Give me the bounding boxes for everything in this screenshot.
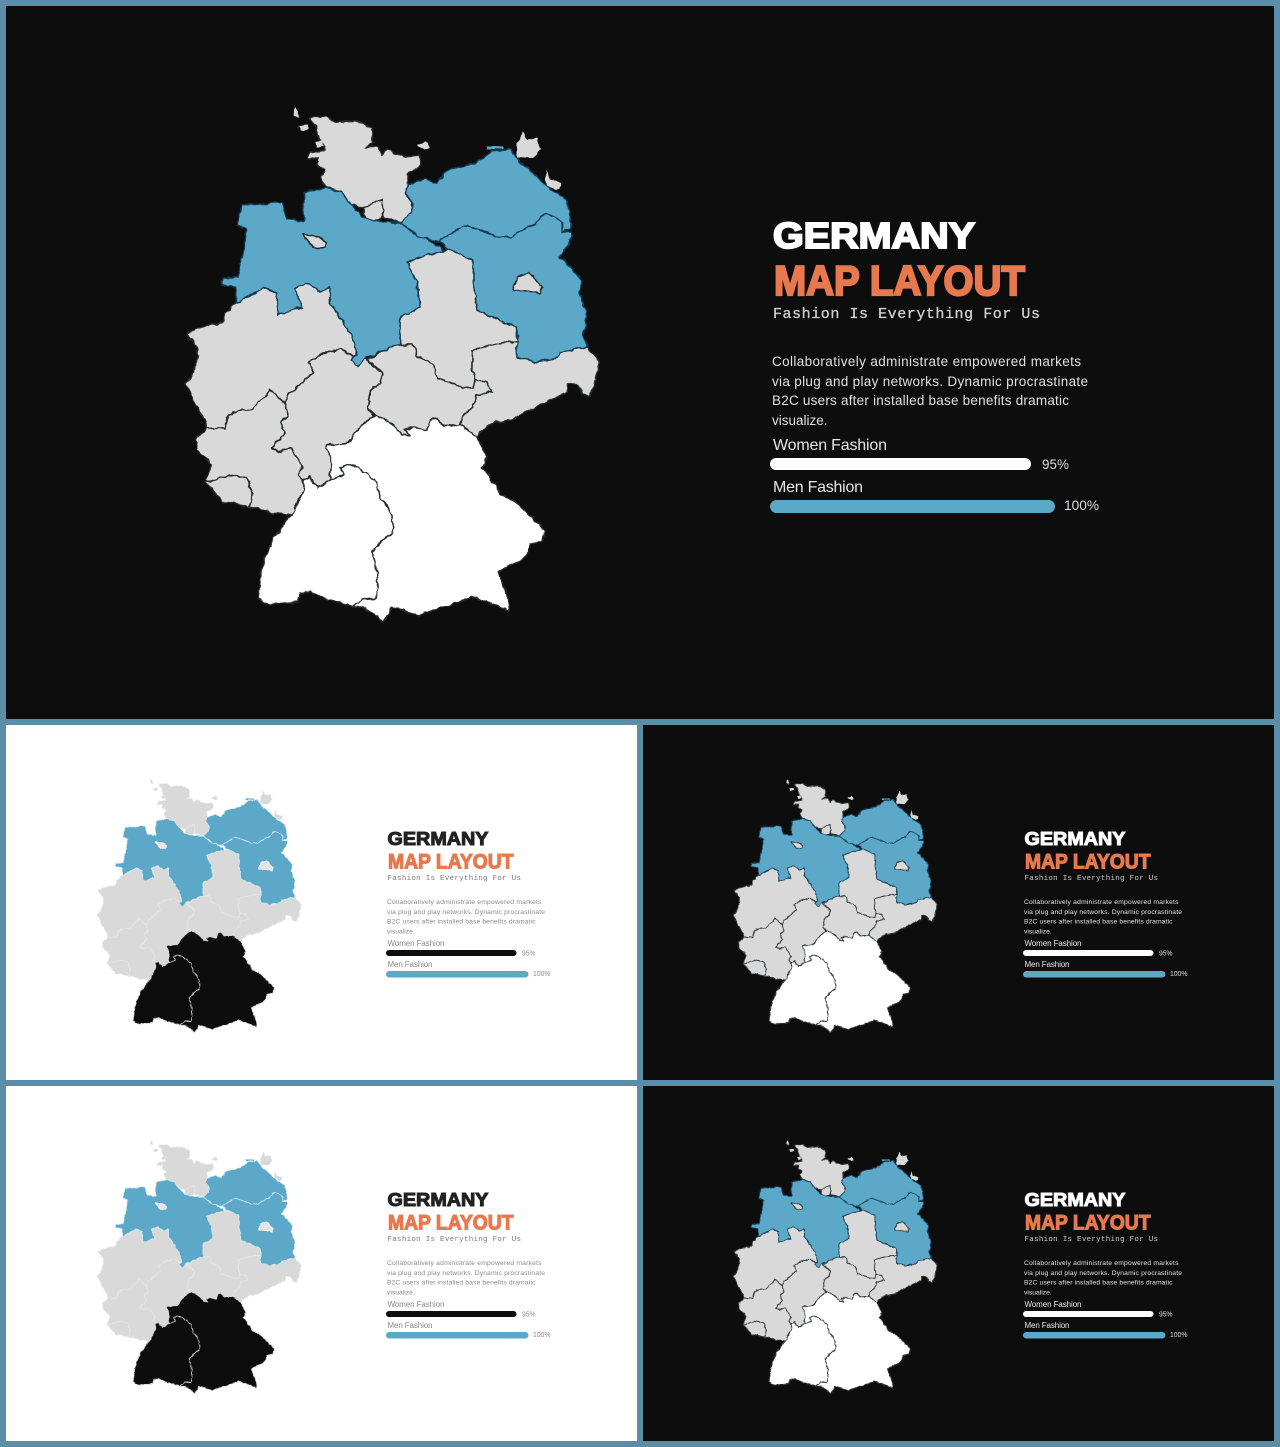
map: Germany dark variant bbox=[733, 1140, 938, 1394]
body text: visualize. bbox=[1024, 928, 1052, 936]
progress: Men Fashion bbox=[1023, 1321, 1188, 1339]
body text bbox=[387, 899, 545, 936]
progress: Men Fashion bbox=[770, 479, 1099, 513]
panel: white slide top left bbox=[6, 725, 637, 1080]
body text bbox=[387, 1260, 545, 1296]
region: Bremen bbox=[303, 234, 327, 249]
map: Germany main bbox=[185, 107, 600, 622]
panel: main dark slide bbox=[6, 6, 1274, 719]
progress: Women Fashion: Women Fashion bbox=[1024, 939, 1082, 948]
progress: Women Fashion bbox=[770, 437, 1069, 472]
text block bbox=[1023, 829, 1188, 978]
heading: Germany: GERMANY bbox=[388, 829, 488, 849]
region: Hesse bbox=[272, 350, 382, 488]
progress: Women Fashion: 95% bbox=[1159, 950, 1172, 958]
heading: Map Layout: MAP LAYOUT bbox=[1025, 1212, 1151, 1234]
region: Brandenburg bbox=[440, 213, 587, 362]
body text: via plug and play networks. Dynamic procrastinate bbox=[772, 374, 1088, 389]
heading: Map Layout: MAP LAYOUT bbox=[388, 1212, 514, 1234]
heading: Map Layout: MAP LAYOUT bbox=[774, 257, 1025, 304]
progress: Women Fashion: 95% bbox=[1042, 456, 1069, 472]
progress: Men Fashion: Men Fashion bbox=[1024, 960, 1070, 969]
blue states bbox=[222, 146, 587, 366]
panel: white slide bottom left bbox=[6, 1086, 637, 1441]
progress: Women Fashion bbox=[386, 939, 536, 958]
progress: Women Fashion bbox=[386, 1300, 536, 1318]
progress: Men Fashion: Men Fashion bbox=[388, 1321, 432, 1330]
progress: Women Fashion: 95% bbox=[522, 950, 536, 958]
gray states bbox=[185, 107, 600, 515]
region: Saarland bbox=[205, 475, 252, 507]
region: Rhineland-Palatinate bbox=[195, 390, 303, 515]
region: Bavaria bbox=[327, 415, 545, 622]
text block: main bbox=[770, 215, 1099, 513]
heading: Germany: GERMANY bbox=[773, 215, 975, 256]
region: Saxony bbox=[460, 342, 600, 437]
progress: Women Fashion: 95% bbox=[1159, 1312, 1172, 1318]
region: Lower Saxony bbox=[222, 188, 445, 366]
progress: Men Fashion: 100% bbox=[533, 971, 550, 978]
progress: Women Fashion: Women Fashion bbox=[388, 939, 444, 948]
progress: Men Fashion: Men Fashion bbox=[773, 479, 863, 496]
body text: via plug and play networks. Dynamic procrastinate bbox=[387, 909, 545, 916]
progress: Men Fashion: Men Fashion bbox=[1024, 1321, 1070, 1330]
region: North Rhine-Westphalia bbox=[185, 283, 357, 428]
body text bbox=[772, 354, 1088, 428]
subtitle: Fashion Is Everything For Us bbox=[1024, 1236, 1158, 1244]
text block bbox=[1023, 1190, 1188, 1339]
body text bbox=[1024, 899, 1182, 936]
progress: Women Fashion: Women Fashion bbox=[388, 1300, 444, 1309]
map: Germany dark variant bbox=[733, 779, 938, 1033]
subtitle: Fashion Is Everything For Us bbox=[388, 875, 521, 883]
panel: dark slide top right bbox=[643, 725, 1274, 1080]
island: Ruegen bbox=[517, 132, 540, 158]
body text: visualize. bbox=[387, 928, 415, 936]
progress: Men Fashion: 100% bbox=[1064, 497, 1099, 513]
subtitle: Fashion Is Everything For Us bbox=[1024, 875, 1158, 883]
body text: visualize. bbox=[1024, 1290, 1052, 1296]
progress: Women Fashion bbox=[1023, 939, 1172, 958]
body text: B2C users after installed base benefits dramatic bbox=[1024, 1280, 1173, 1286]
island: Pellworm bbox=[316, 141, 323, 146]
subtitle: Fashion Is Everything For Us bbox=[773, 306, 1040, 323]
panel: dark slide bottom right bbox=[643, 1086, 1274, 1441]
island: Foehr bbox=[299, 125, 308, 131]
progress: Men Fashion bbox=[1023, 960, 1188, 978]
progress: Men Fashion: Men Fashion bbox=[388, 960, 432, 969]
map: Germany white variant bbox=[97, 1140, 302, 1394]
southern states bbox=[258, 415, 545, 622]
body text: visualize. bbox=[387, 1290, 415, 1296]
progress: Men Fashion: 100% bbox=[533, 1332, 550, 1339]
body text bbox=[1024, 1260, 1182, 1296]
region: Hamburg bbox=[362, 200, 383, 220]
island: Sylt bbox=[294, 107, 299, 117]
island: Poel bbox=[485, 146, 505, 150]
subtitle: Fashion Is Everything For Us bbox=[388, 1236, 521, 1244]
heading: Map Layout: MAP LAYOUT bbox=[388, 850, 514, 874]
map: Germany white variant bbox=[97, 779, 302, 1033]
body text: visualize. bbox=[772, 413, 828, 428]
region: Baden-Wuerttemberg bbox=[258, 465, 393, 607]
body text: B2C users after installed base benefits dramatic bbox=[387, 1280, 536, 1286]
text block bbox=[386, 829, 550, 978]
text block bbox=[386, 1190, 550, 1339]
heading: Germany: GERMANY bbox=[1024, 829, 1126, 849]
body text: via plug and play networks. Dynamic procrastinate bbox=[387, 1270, 545, 1277]
body text: Collaboratively administrate empowered markets bbox=[1024, 899, 1179, 906]
body text: via plug and play networks. Dynamic procrastinate bbox=[1024, 1270, 1182, 1277]
heading: Map Layout: MAP LAYOUT bbox=[1025, 850, 1151, 874]
body text: Collaboratively administrate empowered markets bbox=[387, 1260, 542, 1267]
body text: via plug and play networks. Dynamic procrastinate bbox=[1024, 909, 1182, 916]
progress: Women Fashion bbox=[1023, 1300, 1172, 1318]
progress: Men Fashion: 100% bbox=[1170, 971, 1188, 978]
island: Fehmarn bbox=[418, 142, 430, 150]
body text: B2C users after installed base benefits dramatic bbox=[387, 918, 536, 926]
heading: Germany: GERMANY bbox=[388, 1190, 488, 1210]
body text: Collaboratively administrate empowered markets bbox=[772, 354, 1081, 369]
region: Berlin bbox=[513, 273, 542, 293]
progress: Men Fashion bbox=[386, 960, 550, 978]
body text: B2C users after installed base benefits dramatic bbox=[772, 393, 1069, 408]
enclosed city states bbox=[303, 234, 542, 293]
heading: Germany: GERMANY bbox=[1024, 1190, 1126, 1210]
body text: B2C users after installed base benefits dramatic bbox=[1024, 918, 1173, 926]
island: Usedom bbox=[545, 170, 562, 189]
progress: Men Fashion bbox=[386, 1321, 550, 1339]
progress: Men Fashion: 100% bbox=[1170, 1332, 1188, 1339]
progress: Women Fashion: Women Fashion bbox=[1024, 1300, 1082, 1309]
region: Mecklenburg-Vorpommern bbox=[400, 150, 572, 242]
progress: Women Fashion: Women Fashion bbox=[773, 437, 887, 454]
body text: Collaboratively administrate empowered markets bbox=[1024, 1260, 1179, 1267]
body text: Collaboratively administrate empowered markets bbox=[387, 899, 542, 906]
progress: Women Fashion: 95% bbox=[522, 1312, 536, 1318]
region: Thuringia bbox=[367, 345, 492, 435]
region: Saxony-Anhalt bbox=[400, 248, 517, 388]
region: Schleswig-Holstein bbox=[308, 117, 421, 223]
